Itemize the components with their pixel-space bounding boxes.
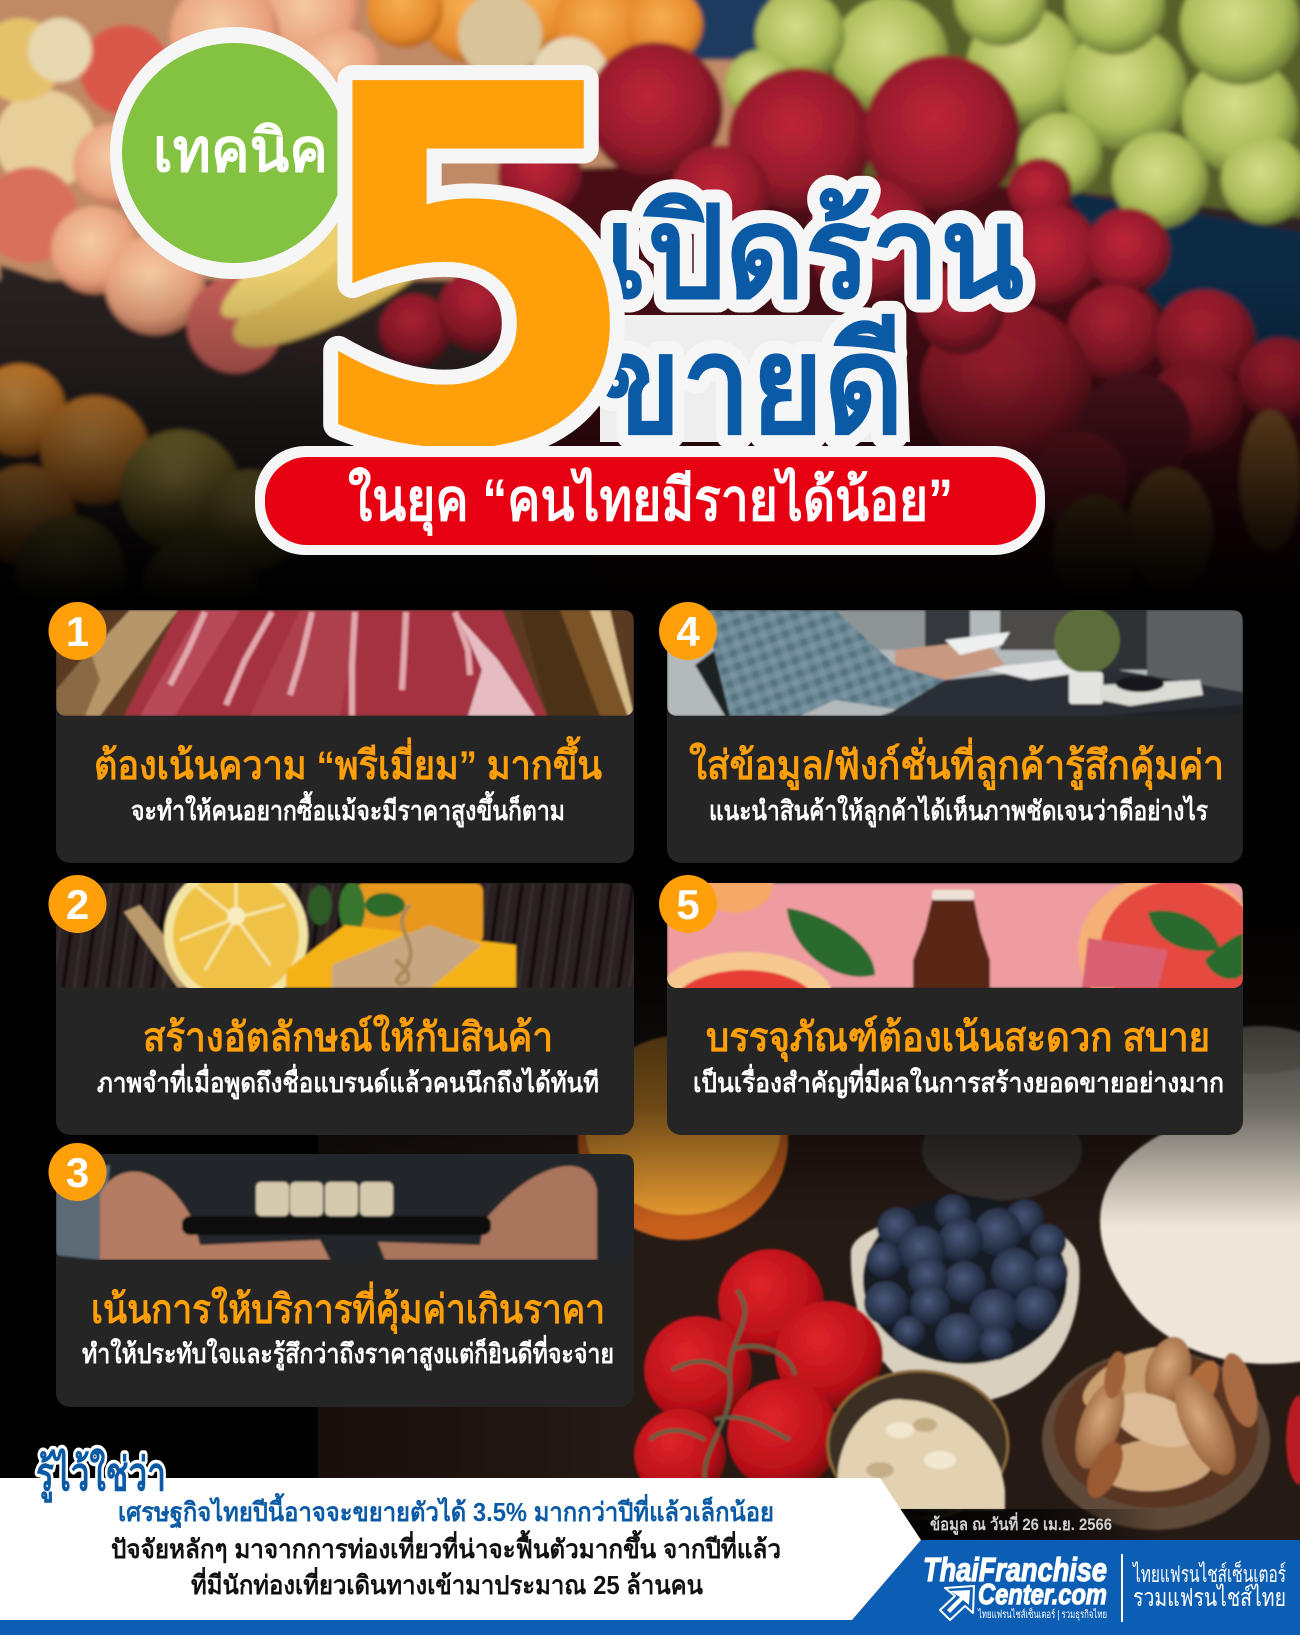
- number badge 5: 5: [676, 881, 700, 928]
- logo: ThaiFranchise Center: Center.com: [978, 1579, 1107, 1611]
- blueberry bowl: [851, 1194, 1080, 1403]
- brand tagline: [1132, 1559, 1286, 1612]
- photo: hands holding phone with dice icons: [56, 1154, 634, 1260]
- orange half: [578, 1035, 788, 1240]
- title badge: green circle เทคนิค: [110, 27, 358, 279]
- heading: ต้องเน้นความ “พรีเมี่ยม” มากขึ้น: [94, 736, 602, 788]
- oats bowl: [828, 1371, 1008, 1519]
- description: ทำให้ประทับใจและรู้สึกว่าถึงราคาสูงแต่ก็ยินดีที่จะจ่าย: [82, 1334, 614, 1371]
- source strip: [900, 1509, 1160, 1541]
- title: เปิดร้าน: เปิดร้าน: [605, 182, 1024, 325]
- heading: เน้นการให้บริการที่คุ้มค่าเกินราคา: [91, 1281, 605, 1335]
- photo: sliced premium beef: [56, 610, 634, 716]
- panel: tip 5: [657, 857, 1262, 1135]
- panel: tip 2: [48, 863, 634, 1135]
- background photo: fruit market stall: [0, 0, 1300, 646]
- body line 2: ที่มีนักท่องเที่ยวเดินทางเข้ามาประมาณ 25 ล้านคน: [191, 1566, 703, 1600]
- tomatoes: [634, 1249, 883, 1501]
- title: ขายดี: ขายดี: [597, 309, 904, 463]
- number badge 3: 3: [66, 1149, 89, 1196]
- title badge: green circle เทคนิค: เทคนิค: [153, 117, 328, 184]
- logo: ThaiFranchise Center: ThaiFranchise: [923, 1551, 1107, 1588]
- footer: blue brand band: [0, 1540, 1300, 1635]
- logo: ThaiFranchise Center: ไทยแฟรนไชส์เซ็นเตอร์ | รวมธุรกิจไทย: [977, 1607, 1107, 1621]
- body line 1: ปัจจัยหลักๆ มาจากการท่องเที่ยวที่น่าจะฟื้นตัวมากขึ้น จากปีที่แล้ว: [111, 1529, 781, 1564]
- panel: tip 3: [48, 1143, 634, 1407]
- panel: tip 4: [659, 602, 1243, 863]
- logo divider: [1121, 1554, 1123, 1622]
- panel: tip 1: [48, 602, 634, 863]
- description: แนะนำสินค้าให้ลูกค้าได้เห็นภาพชัดเจนว่าดีอย่างไร: [709, 793, 1208, 828]
- number badge 5: [659, 875, 717, 933]
- highlighted fact: เศรษฐกิจไทยปีนี้อาจจะขยายตัวได้ 3.5% มากกว่าปีที่แล้วเล็กน้อย: [118, 1492, 774, 1530]
- number badge 4: [659, 602, 717, 660]
- description: จะทำให้คนอยากซื้อแม้จะมีราคาสูงขึ้นก็ตาม: [131, 790, 565, 828]
- description: ภาพจำที่เมื่อพูดถึงชื่อแบรนด์แล้วคนนึกถึงได้ทันที: [97, 1063, 599, 1100]
- title: red banner: [255, 446, 1045, 555]
- heading: สร้างอัตลักษณ์ให้กับสินค้า: [143, 1014, 553, 1060]
- heading: บรรจุภัณฑ์ต้องเน้นสะดวก สบาย: [706, 1015, 1210, 1063]
- background photo: healthy food table: [318, 985, 1300, 1620]
- number badge 2: 2: [66, 881, 89, 928]
- logo: ThaiFranchise Center: [923, 1551, 1107, 1621]
- number badge 1: 1: [66, 608, 89, 655]
- panel: did you know: [0, 1447, 921, 1620]
- number badge 1: [48, 602, 106, 660]
- photo: office desk with documents: [667, 607, 1243, 716]
- dark bowl: [922, 1100, 1082, 1200]
- almond bowl: [1042, 1332, 1270, 1530]
- number badge 3: [48, 1143, 106, 1201]
- photo: essential oil with grapefruit: [667, 883, 1243, 988]
- title: white plate behind headline: [600, 315, 910, 442]
- title: red banner: ในยุค “คนไทยมีรายได้น้อย”: [348, 466, 953, 537]
- number badge 2: [48, 875, 106, 933]
- icon: arrow: [940, 1586, 974, 1620]
- description: เป็นเรื่องสำคัญที่มีผลในการสร้างยอดขายอย่างมาก: [693, 1063, 1224, 1099]
- number badge 4: 4: [676, 608, 700, 655]
- heading: รู้ไว้ใช่ว่า: [36, 1447, 166, 1503]
- milk jug: [1100, 1026, 1300, 1364]
- heading: ใส่ข้อมูล/ฟังก์ชั่นที่ลูกค้ารู้สึกคุ้มค่า: [689, 737, 1224, 791]
- source strip: ข้อมูล ณ วันที่ 26 เม.ย. 2566: [930, 1512, 1112, 1536]
- photo: lemon and soap: [56, 883, 634, 988]
